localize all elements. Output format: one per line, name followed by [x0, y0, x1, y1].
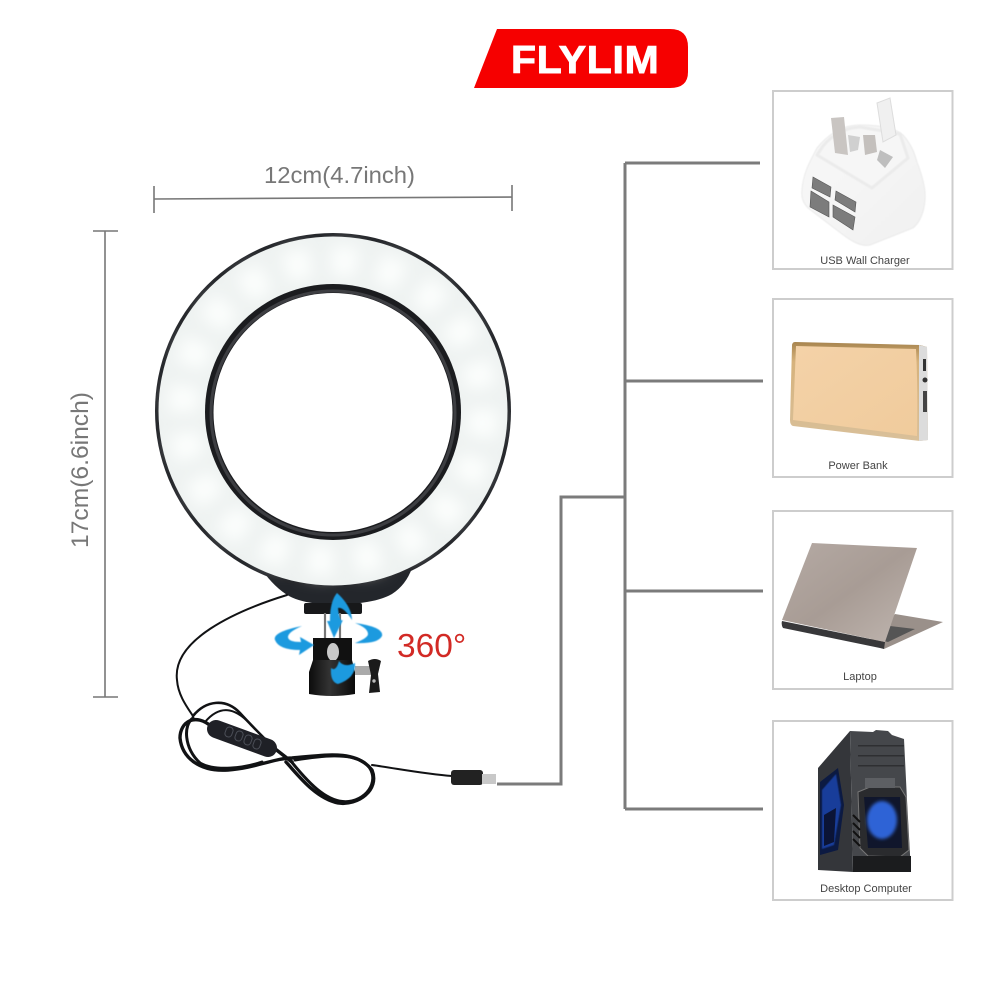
mount knob	[355, 666, 371, 675]
icon: power bank	[790, 342, 928, 441]
ball joint	[327, 643, 339, 661]
mount lever	[368, 659, 381, 693]
cable coils	[193, 703, 268, 742]
ball head mount	[304, 603, 381, 696]
ring light base	[262, 568, 412, 604]
label: Laptop: Laptop	[843, 671, 877, 683]
ring light housing	[155, 233, 511, 589]
LED diffuser	[158, 236, 508, 586]
icon: laptop	[782, 543, 943, 649]
width dimension: 12cm	[154, 162, 512, 213]
connector lines	[497, 163, 763, 809]
label: USB Wall Charger: USB Wall Charger	[820, 255, 910, 267]
width dimension: 12cm: 12cm(4.7inch)	[264, 162, 415, 188]
height dimension: 17cm: 17cm(6.6inch)	[67, 392, 94, 548]
mount stem	[325, 613, 340, 640]
panel: desktop computer	[773, 721, 952, 900]
icon: desktop tower	[818, 730, 911, 872]
power cable	[177, 595, 452, 803]
label: Desktop Computer: Desktop Computer	[820, 883, 912, 895]
ring opening	[214, 293, 452, 532]
ring light	[155, 233, 511, 604]
panel: USB wall charger	[773, 91, 952, 269]
inner bezel	[205, 284, 461, 540]
mount upper cup	[313, 638, 352, 668]
mount plate	[304, 603, 362, 614]
cable to ring	[177, 595, 287, 716]
360 label: 360°	[397, 628, 466, 665]
USB plug	[451, 770, 496, 785]
360 degree rotation arrows	[275, 593, 382, 684]
mount lower body	[309, 660, 355, 696]
inline switch	[216, 726, 268, 750]
panel: power bank	[773, 299, 952, 477]
brand logo: FLYLIM	[474, 29, 688, 88]
label: Power Bank: Power Bank	[828, 460, 888, 472]
icon: charger	[802, 98, 925, 245]
height dimension: 17cm	[67, 231, 118, 697]
panel: laptop	[773, 511, 952, 689]
LED glow segments	[183, 261, 483, 561]
brand logo: FLYLIM: FLYLIM	[511, 39, 659, 82]
